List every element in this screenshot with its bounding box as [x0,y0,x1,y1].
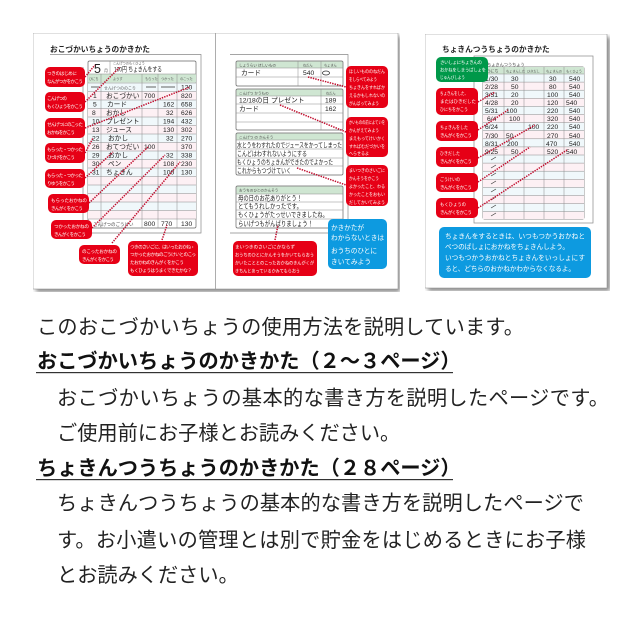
callouts: savings notes: きんがくをかこう [440,132,472,139]
callouts: red notes left page: おかねをかこう [47,129,75,136]
savings table: 80 [549,84,557,91]
callouts: savings notes: きんがくをかこう [440,184,472,191]
allowance table: プレゼント [106,116,139,126]
savings table: 540 [569,124,580,131]
allowance table: 32 [166,110,174,117]
heading: savings book section: ちょきんつうちょうのかきかた（２８ページ） [37,457,461,480]
callouts: red notes left page: こんげつの [47,95,67,102]
allowance table: 162 [163,102,174,108]
panel: purchases [236,89,343,130]
savings table: 470 [546,141,557,148]
panel: parent comment [236,186,343,228]
allowance table: 770 [161,221,172,228]
callouts: red notes left page: せんげつにのこった [47,121,83,128]
heading: allowance book section: おこづかいちょうのかきかた（２～３ページ） [37,350,461,373]
allowance table: 820 [181,93,192,100]
callouts: red notes right page: をしらべてみよう [349,76,377,83]
allowance table: 8 [92,110,96,117]
savings table: 320 [547,116,558,123]
allowance table: 22 [92,136,100,142]
text block: savings book description: す。お小遣いの管理とは別で貯金をはじめるときにお子様 [57,529,586,552]
callouts: savings notes: ちょきんをした、 [440,90,468,97]
callouts: red notes left page: もくひょうはうまくできたかな？ [130,267,192,274]
callouts: red notes right page: よかったこと、わる [349,183,385,190]
panel: savings book page [425,34,610,291]
callouts: red notes right page: かんがえてみよう [349,127,379,134]
panel: wish list: カード [241,69,261,77]
savings table: 540 [569,133,580,140]
allowance table: 700 [144,93,155,100]
callouts: savings notes: きんがくをかこう [440,209,472,216]
allowance table: 230 [181,161,192,168]
callouts: red notes left page: もらった・つかった [47,172,83,179]
panel: purchases: 12/18の日 プレゼント [239,96,304,104]
allowance table: 130 [181,170,192,176]
callouts: savings notes: またはひきだした [440,98,476,105]
panel: parent comment: おうちのひとのかんそう [239,188,278,192]
callouts: red notes right page: かんそうをかこう [349,175,379,182]
callout: savings advice: べつのばしょにおかねをちょきんしよう。 [445,242,569,251]
savings table: 20 [511,92,519,99]
panel: parent comment: とてもうれしかったです。 [238,202,302,210]
allowance table: 130 [163,127,174,134]
allowance table: ようす [113,76,123,81]
savings table: 540 [569,141,580,148]
savings table: 540 [569,76,580,83]
callout: blue note: きいてみよう [331,258,371,266]
callouts: savings notes: さいしょにちょきんの [440,59,482,66]
allowance table: おかし [108,134,128,142]
callouts: red notes right page: がんばってみよう [349,100,379,107]
allowance table: 30 [92,161,100,168]
text block: savings book description: ちょきんつうちょうの基本的な書き方を説明したページで [57,492,584,515]
allowance table: おかし [106,109,126,117]
panel: parent comment: もくひょうがたっせいできましたね。 [238,210,328,219]
savings table: 4/28 [485,100,498,107]
callouts: savings notes: ちょきんをした [440,124,468,131]
panel: purchases: カード [239,105,259,113]
arrows: savings leader lines [478,92,567,208]
savings table: 50 [511,149,519,156]
callouts: red notes left page: つきのはじめに [47,70,77,77]
savings table: 9/25 [485,149,498,156]
callouts: red notes left page: きんがくをかこう [54,231,86,238]
callouts: red notes right page: きちんとあっているかみてもらおう [235,268,300,274]
panel: own reflection: こんげつ の かんそう [239,134,273,140]
panel: own reflection: もくひょうのちょきんができたのでよかった [237,158,333,166]
savings table: 220 [547,124,558,131]
savings table: 540 [569,84,580,91]
text block: allowance book description: おこづかいちょうの基本的な書き方を説明したページです。 [57,387,609,410]
savings table: 220 [547,108,558,115]
allowance table: ジュース [106,126,132,134]
callouts: red notes left page: きんがくをかこう [82,256,114,263]
panel: own reflection [236,133,343,175]
panel: parent comment: らいげつもがんばりましょう！ [238,219,313,228]
savings table: 100 [547,92,558,99]
allowance table: 26 [92,144,100,151]
allowance table: こんげつのごうけい [93,221,134,228]
allowance table: せんげつののこり [104,84,136,90]
allowance table: 100円 ちょきんをする [114,66,162,74]
allowance table: 100 [144,144,155,151]
savings table: 30 [549,76,557,83]
savings table: 100 [509,116,520,123]
allowance table: 100 [163,170,174,176]
allowance table: 29 [92,152,100,160]
allowance table: のこった [180,76,193,81]
allowance table: 13 [92,127,100,134]
panel: wish list: しょうらい ほしいもの [239,62,276,68]
savings table: 3/31 [485,92,498,99]
callouts: red notes right page: かいものの前によていを [349,119,385,126]
callout: blue note: おうちのひとに [331,247,377,255]
savings table: 540 [569,108,580,115]
callouts: savings notes: ごうけいの [440,176,460,183]
panel: open notebook spread [33,33,400,292]
savings table: 520 [547,149,558,156]
callouts: red notes right page: おうちのひとにかんそうをかいてもらおう [235,252,314,258]
panel: wish list: 540 [303,70,314,77]
panel: purchases: 162 [325,106,336,113]
arrows: dotted leader lines [85,65,346,243]
callouts: red notes right page: ちょきんをすればか [349,84,385,91]
callouts: red notes left page: なんがつかをかこう [47,78,83,85]
allowance table: おかし [108,152,128,160]
allowance table: 108 [163,161,174,168]
text block: savings book description: とお読みください。 [57,564,239,587]
savings table [483,62,584,219]
callouts: savings notes [436,57,488,218]
callouts: red notes right page: だしてかいてみよう [349,199,385,206]
savings table: 200 [507,141,518,148]
savings table: 50 [511,84,519,91]
savings table: 540 [569,116,580,123]
savings table: ちょきんつうちょう [487,62,525,68]
allowance table: ひにち [89,76,99,81]
callouts: red notes right page: えるかもしれないの [349,92,385,99]
panel: purchases: 189 [325,98,336,104]
savings table: 100 [528,124,539,131]
allowance table: 32 [166,136,174,142]
savings table: 6/24 [485,124,498,131]
heading: allowance book: おこづかいちょうのかきかた [50,44,150,54]
panel: wish list [236,61,343,86]
allowance table: 432 [181,118,192,126]
savings table: ひきだし [527,68,540,74]
allowance table: もらった [145,76,158,81]
savings table: 2/28 [485,84,498,91]
panel: own reflection: 水とうをわすれたのでジュースをかってしまった [237,140,342,150]
callouts: red notes left page: もくひょうをかこう [47,103,83,110]
allowance table: 130 [181,221,192,228]
allowance table: おこづかい [106,91,140,100]
allowance table: 5 [93,102,97,108]
callouts: red notes right page [233,66,388,276]
allowance table: 270 [181,136,192,142]
savings table: 20 [511,100,519,107]
allowance table: 31 [92,170,100,176]
callouts: red notes right page: まいつきのさいごに [349,167,385,174]
allowance table: 800 [144,221,155,228]
savings table: 540 [566,100,577,107]
savings table: 8/31 [485,141,498,148]
callouts: red notes left page: たおかねのきんがくをかこう [130,259,184,266]
callouts: red notes left page: ひづけをかこう [47,154,75,161]
savings table: 540 [566,149,577,156]
panel: parent comment: 母の日のお花ありがとう！ [238,194,302,202]
savings table: 7/30 [485,133,498,140]
allowance table: 10 [92,118,100,126]
callouts: savings notes: おかねをしまうばしょを [440,66,486,74]
callouts: red notes left page: きんがくをかこう [51,205,83,212]
callout: savings advice: ちょきんをするときは、いつもつかうおかねと [445,232,585,240]
allowance table: ペン [108,160,122,168]
allowance table: 338 [181,152,192,160]
savings table: 1/30 [485,76,498,83]
callouts: red notes right page: かいたこととのこったおかねのきんがくが [235,260,314,266]
allowance table: 194 [163,118,174,126]
callouts: savings notes: ひにちをかこう [440,106,468,113]
callouts: red notes left page [45,67,198,276]
callout: blue note [328,219,387,269]
savings table: 270 [547,133,558,140]
callout: blue note: わからないときは [331,234,384,242]
text block: allowance book description [57,387,609,445]
callouts: red notes left page: りゆうをかこう [47,180,75,187]
allowance table: 120 [181,84,192,92]
savings table: 120 [547,100,558,107]
panel: wish list: ちょきん [324,62,338,68]
allowance table: 302 [181,127,192,134]
savings table: 5/31 [485,108,498,115]
callouts: red notes right page: かったことをおもい [349,191,385,198]
callouts: savings notes: ひきだした [440,150,460,157]
savings table: ひにち [487,68,499,74]
panel: purchases: ねだん [326,90,336,96]
callouts: savings notes: きんがくをかこう [440,158,472,165]
panel: own reflection: これからもつづけていく [237,166,291,175]
callout: blue note: かきかたが [331,223,364,232]
text block: allowance book description: ご使用前にお子様とお読みください。 [57,422,400,445]
savings table: 540 [569,92,580,99]
savings table: 6/4 [487,116,497,123]
panel: purchases: こんげつ かうもの [239,90,269,96]
callout: savings advice: いつもつかうおかねとちょきんをいっしょにす [445,254,585,262]
callouts: red notes left page: つかったおかねの [54,223,89,230]
callouts: red notes left page: もらった・つかった [47,146,83,153]
allowance table: 658 [181,102,192,108]
allowance table: 370 [181,144,192,151]
savings table: ちょきんの [546,68,562,74]
allowance table: 626 [181,110,192,117]
panel: own reflection: こんどはわすれないようにする [237,150,307,158]
callouts: red notes left page: のこったおかねの [82,248,117,255]
text block: introduction: このおこづかいちょうの使用方法を説明しています。 [37,316,524,339]
allowance table: つかった [161,76,174,81]
callouts: red notes left page: つかったおかねのごうけいとのこっ [130,251,196,258]
allowance table: 5 [94,62,101,76]
callouts: red notes right page: まいつきのさいごにかならず [235,244,295,250]
allowance table: 32 [166,152,174,160]
allowance table: おてつだい [106,143,140,151]
savings table: 30 [511,76,519,83]
heading: savings book: ちょきんつうちょうのかきかた [442,44,550,54]
allowance table [88,60,196,228]
allowance table: 1 [93,93,97,100]
savings table: もくひょう [566,68,582,74]
allowance table: カード [107,100,127,108]
callout: savings advice: ると、どちらのおかねかわからなくなるよ。 [445,265,575,273]
callouts: red notes right page: すればむだづかいを [349,143,385,150]
panel: wish list: ねだん [303,62,313,68]
callout: savings advice [439,227,591,278]
savings table: 100 [506,108,517,115]
callouts: savings notes: もくひょうの [440,202,466,208]
allowance table: ちょきん [106,168,133,176]
savings table: ちょきんした [506,68,525,74]
allowance table: 月 [104,68,108,73]
callouts: red notes right page: まえもってけいかく [349,135,385,142]
callouts: savings notes: じゅんびしよう [440,74,465,81]
callouts: red notes left page: もらったおかねの [51,197,87,204]
callouts: red notes right page: へらせるよ [349,151,369,157]
text block: savings book description [57,492,586,587]
savings table: 50 [506,133,514,140]
allowance table: こんげつのもくひょう [113,60,145,66]
callouts: red notes left page: つきのさいごに、はいったおかね・ [130,244,195,250]
callouts: red notes right page: ほしいもののねだん [349,69,385,75]
